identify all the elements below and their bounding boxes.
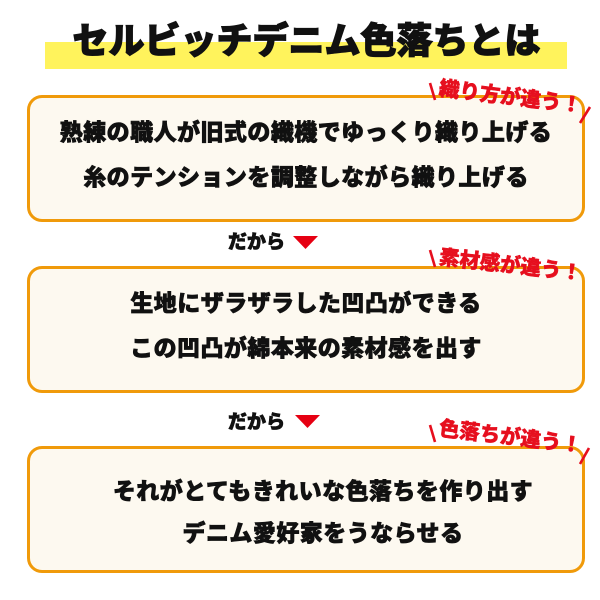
text: fading line 2: デニム愛好家をうならせる [183, 520, 463, 546]
text: material line 1: 生地にザラザラした凹凸ができる [130, 290, 482, 316]
callout: material differs: 素材感が違う！ [438, 246, 583, 285]
panel: material [27, 266, 585, 393]
text: fading line 1: それがとてもきれいな色落ちを作り出す [113, 478, 533, 504]
callout: weaving differs: 織り方が違う！ [438, 77, 583, 117]
text: weaving line 2: 糸のテンションを調整しながら織り上げる [83, 164, 529, 190]
connector label 1: だから [228, 232, 285, 253]
text: weaving line 1: 熟練の職人が旧式の織機でゆっくり織り上げる [60, 119, 552, 145]
panel: fading [27, 446, 585, 573]
text: material line 2: この凹凸が綿本来の素材感を出す [130, 335, 482, 361]
title highlight bar [45, 42, 567, 69]
panel: weaving [27, 95, 585, 222]
connector label 2: だから [228, 412, 285, 433]
callout: fading differs: 色落ちが違う！ [438, 417, 583, 457]
title: セルビッチデニム色落ちとは [72, 20, 540, 61]
